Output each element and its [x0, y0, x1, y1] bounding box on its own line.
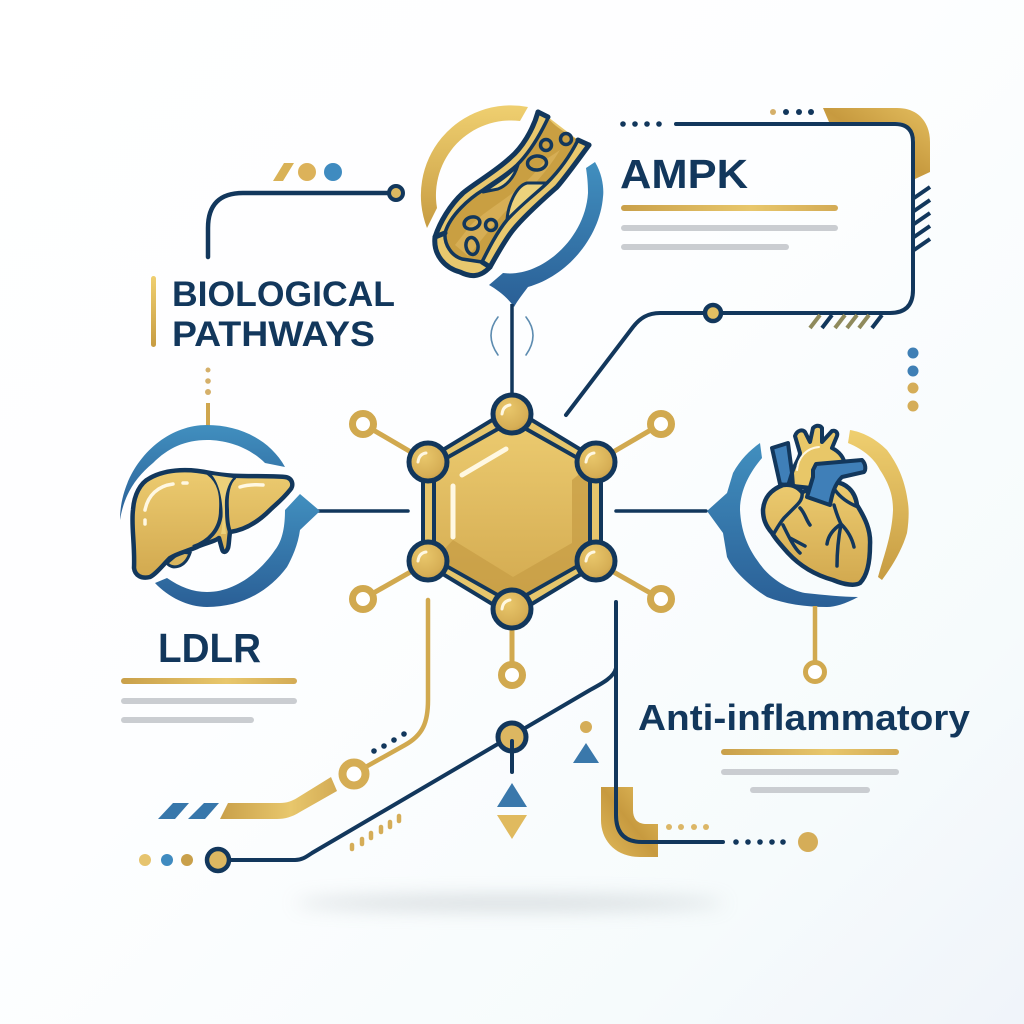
hexagon shaded facet	[436, 467, 588, 601]
heart vena cava	[772, 443, 792, 486]
AMPK top dots	[770, 109, 814, 115]
small gold dot and blue triangle	[573, 721, 599, 763]
icon: artery	[421, 105, 603, 307]
navy path lower left with node	[207, 668, 616, 871]
AMPK text bars	[621, 205, 838, 250]
liver body	[132, 470, 292, 578]
heart highlight	[797, 447, 819, 470]
AMPK left dots	[620, 121, 662, 127]
hexagon highlights	[453, 449, 506, 537]
heart aorta	[792, 426, 845, 490]
junction node and stem	[498, 723, 526, 772]
heart stem ring	[806, 606, 824, 682]
heart ventricles	[763, 482, 870, 585]
gold dots row	[666, 824, 709, 830]
top left shapes	[273, 163, 342, 181]
artery outer walls	[435, 112, 589, 276]
top left connector	[208, 186, 403, 257]
icon: central hexagon molecule	[409, 395, 615, 628]
artery end caps	[435, 112, 589, 267]
liver blue top arc	[120, 425, 285, 520]
gold dashes	[352, 816, 399, 849]
icon: heart	[707, 426, 909, 607]
liver highlights	[145, 483, 263, 524]
AMPK side stripes	[914, 187, 930, 250]
heading text: PATHWAYS	[172, 315, 375, 354]
AMPK frame node	[705, 305, 721, 321]
heart vessels	[773, 490, 858, 566]
triangles	[497, 783, 527, 839]
artery plaques	[483, 165, 518, 192]
molecule spokes	[352, 414, 672, 686]
ground shadow	[295, 896, 725, 910]
AMPK frame line	[566, 124, 913, 415]
heart pulmonary artery	[807, 460, 865, 505]
icon: liver	[120, 425, 320, 607]
liver lobe lines	[193, 473, 235, 547]
heart gold arc	[848, 430, 909, 580]
AMPK gold corner	[823, 108, 930, 179]
label: LDLR: LDLR	[158, 625, 261, 671]
artery lumen	[445, 118, 578, 262]
liver blue bottom arc with connector	[155, 494, 320, 607]
artery lumen light centre	[455, 150, 560, 256]
navy dots row	[733, 839, 786, 845]
artery vessel	[435, 112, 589, 276]
panel: biological pathways heading	[151, 275, 395, 354]
navy path lower right	[616, 602, 723, 842]
AMPK bottom hatch	[810, 315, 882, 328]
gold path lower left	[342, 600, 428, 786]
artery blue arc with connector	[489, 162, 603, 307]
AMPK label: AMPK	[620, 151, 748, 197]
bottom left dots	[139, 854, 193, 866]
gold band and blue slants	[158, 777, 337, 819]
liver gall bladder	[167, 552, 190, 567]
label: Anti-inflammatory: Anti-inflammatory	[638, 697, 970, 738]
navy line artery to hexagon	[510, 304, 514, 396]
liver falciform fill	[212, 475, 233, 534]
LDLR text bars	[121, 678, 297, 723]
hexagon inner body	[434, 421, 590, 603]
heading accent bar	[151, 276, 156, 347]
artery gold arc	[421, 105, 528, 228]
artery cells	[463, 134, 572, 255]
signal arcs	[491, 317, 533, 355]
heading text: BIOLOGICAL	[172, 275, 395, 314]
navy dots along gold path	[371, 731, 407, 754]
heart blue arc with connector	[707, 443, 858, 607]
panel: AMPK	[566, 108, 930, 415]
gold end dot	[798, 832, 818, 852]
artery inner walls	[445, 118, 578, 262]
navy lines left and right of hexagon	[318, 509, 706, 513]
gold L shape	[601, 787, 658, 857]
hexagon nodes	[409, 395, 615, 628]
artery wall fill	[435, 112, 589, 276]
hexagon outer ring	[423, 408, 601, 616]
right dots column	[908, 348, 918, 412]
Anti-inflammatory text bars	[721, 749, 899, 793]
gold dotted stem to liver	[205, 368, 211, 426]
